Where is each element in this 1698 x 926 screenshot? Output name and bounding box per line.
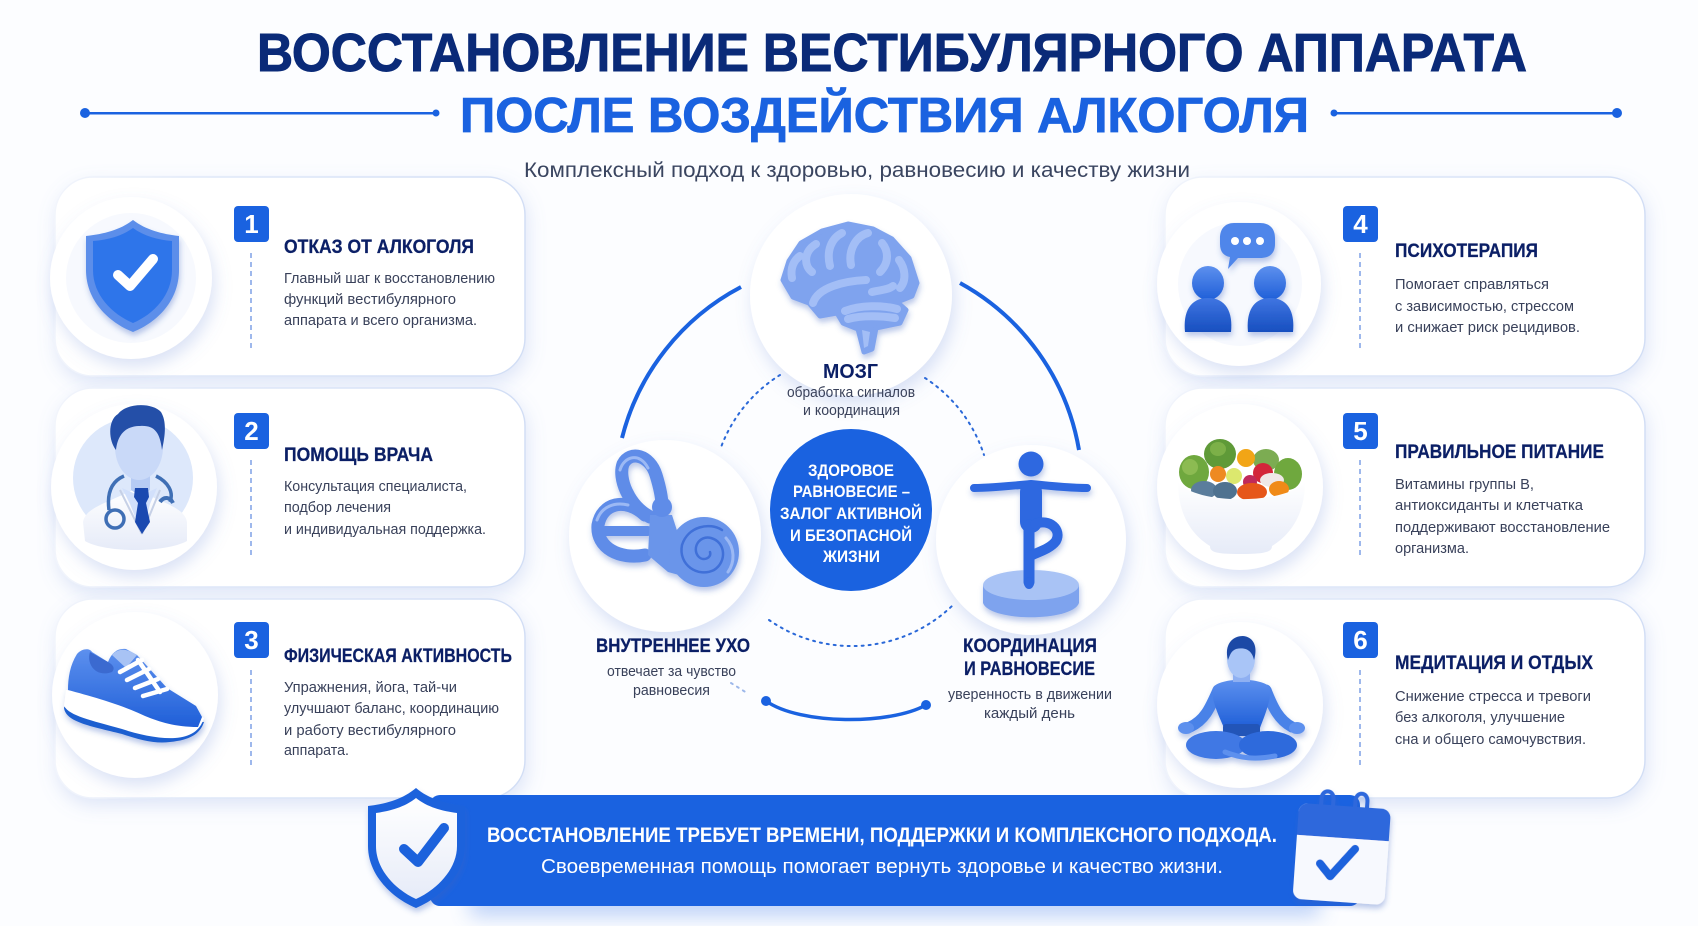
label: inner ear: отвечает за чувство [607,663,736,680]
heading 2: ПОМОЩЬ ВРАЧА [284,445,433,466]
left title rule [80,108,440,118]
badge 5: 5 [1353,416,1368,446]
heading 1: ОТКАЗ ОТ АЛКОГОЛЯ [284,237,474,258]
icon: inner ear [597,456,739,587]
icon circle 5 [1157,404,1323,570]
center circle callout: ЗАЛОГ АКТИВНОЙ [780,504,922,523]
title line 2: ПОСЛЕ ВОЗДЕЙСТВИЯ АЛКОГОЛЯ [460,88,1309,143]
label: inner ear: равновесия [633,682,710,699]
arc: bottom connector [761,696,931,720]
icon: salad bowl [1178,439,1305,554]
text 5: поддерживают восстановление [1395,519,1610,536]
right title rule [1330,108,1622,118]
text 3: аппарата. [284,742,349,759]
icon circle 6 [1157,622,1323,788]
subtitle: Комплексный подход к здоровью, равновесию и качеству жизни [524,159,1190,182]
text 5: организма. [1395,540,1469,557]
label: coordination [948,636,1112,722]
panel: card 2 [51,388,525,587]
center circle callout: И БЕЗОПАСНОЙ [790,526,912,545]
center circle callout: ЗДОРОВОЕ [808,461,894,480]
text 2: и индивидуальная поддержка. [284,521,486,538]
icon: calendar [1292,789,1392,905]
label: inner ear [596,636,750,699]
label: coordination: И РАВНОВЕСИЕ [964,659,1095,680]
text 5: антиоксиданты и клетчатка [1395,497,1584,514]
icon: balancing figure [974,452,1087,617]
text 4 [1395,276,1580,336]
banner text line 2: Своевременная помощь помогает вернуть здоровье и качество жизни. [541,856,1223,878]
label: brain: обработка сигналов [787,384,915,401]
heading 6: МЕДИТАЦИЯ И ОТДЫХ [1395,653,1593,674]
icon circle 2 [51,404,217,570]
title block [80,23,1622,182]
heading 5: ПРАВИЛЬНОЕ ПИТАНИЕ [1395,442,1604,463]
badge 1 [234,206,269,242]
icon: shield check [86,220,179,332]
text 5 [1395,476,1610,557]
node: balance circle [936,445,1126,635]
text 2: Консультация специалиста, [284,478,467,495]
badge 5 [1343,413,1378,449]
badge 2 [234,413,269,449]
banner text line 1: ВОССТАНОВЛЕНИЕ ТРЕБУЕТ ВРЕМЕНИ, ПОДДЕРЖКИ И КОМПЛЕКСНОГО ПОДХОДА. [487,824,1277,847]
text 1 [284,270,495,329]
text 4: и снижает риск рецидивов. [1395,319,1580,336]
badge 2: 2 [244,416,259,446]
text 1: функций вестибулярного [284,291,456,308]
text 2: подбор лечения [284,499,391,516]
label: coordination: КООРДИНАЦИЯ [963,636,1097,657]
icon: brain [783,224,917,352]
panel: card 4 [1157,177,1645,376]
badge 3 [234,622,269,658]
badge 4 [1343,206,1378,242]
center circle callout [770,429,932,591]
badge 3: 3 [244,625,259,655]
icon: doctor [83,405,187,550]
text 5: Витамины группы В, [1395,476,1534,493]
text 4: с зависимостью, стрессом [1395,298,1574,315]
text 6: без алкоголя, улучшение [1395,709,1565,726]
text 3: и работу вестибулярного [284,722,456,739]
label: brain: и координация [803,402,900,419]
central diagram [569,194,1126,722]
title line 1: ВОССТАНОВЛЕНИЕ ВЕСТИБУЛЯРНОГО АППАРАТА [257,23,1527,83]
icon circle 1 [50,197,212,359]
banner [368,788,1392,916]
text 3: улучшают баланс, координацию [284,700,499,717]
label: brain: МОЗГ [823,361,878,383]
text 1: аппарата и всего организма. [284,312,477,329]
label: coordination: уверенность в движении [948,686,1112,703]
panel: card 6 [1157,599,1645,798]
text 1: Главный шаг к восстановлению [284,270,495,287]
text 6: Снижение стресса и тревоги [1395,688,1591,705]
panel: card 5 [1157,388,1645,587]
node: inner ear circle [569,440,761,632]
badge 6: 6 [1353,625,1368,655]
icon: banner shield [368,788,465,908]
label: brain [787,361,915,419]
panel: card 1 [50,177,525,376]
panel: card 3 [52,599,525,798]
icon circle 4 [1157,202,1321,366]
text 3 [284,679,499,759]
icon: meditating person [1178,636,1305,759]
badge 1: 1 [244,209,259,239]
text 6 [1395,688,1591,748]
text 3: Упражнения, йога, тай-чи [284,679,457,696]
icon: sneaker [64,649,204,743]
dotted inner ring [720,375,984,693]
node: brain circle [750,194,952,396]
text 4: Помогает справляться [1395,276,1549,293]
badge 4: 4 [1353,209,1368,239]
label: inner ear: ВНУТРЕННЕЕ УХО [596,636,750,657]
text 6: сна и общего самочувствия. [1395,731,1586,748]
center circle callout: ЖИЗНИ [822,547,880,566]
badge 6 [1343,622,1378,658]
heading 4: ПСИХОТЕРАПИЯ [1395,241,1538,262]
icon: people talking [1185,223,1293,332]
text 2 [284,478,486,538]
arc: outer ring [622,283,1079,450]
center circle callout: РАВНОВЕСИЕ – [793,482,910,501]
label: coordination: каждый день [984,705,1075,722]
icon circle 3 [52,612,218,778]
heading 3: ФИЗИЧЕСКАЯ АКТИВНОСТЬ [284,646,512,667]
